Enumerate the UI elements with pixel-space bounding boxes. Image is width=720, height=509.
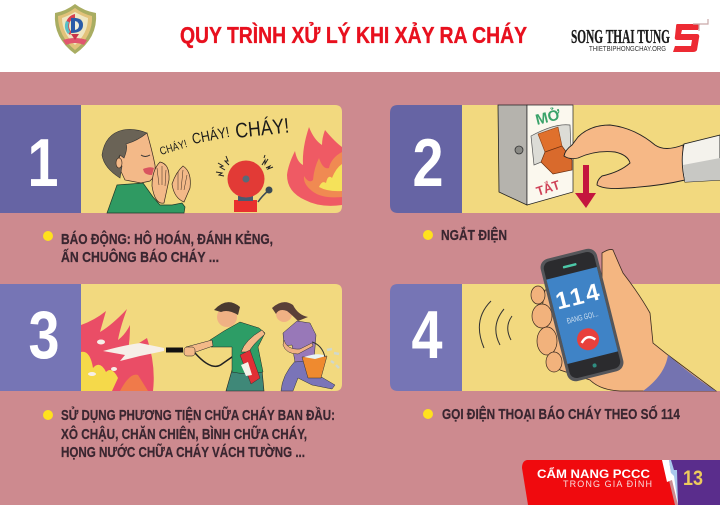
icon: phone: ĐANG GỌI... — [566, 309, 599, 326]
text: shouts: CHÁY! — [191, 124, 231, 148]
arrow: down — [575, 165, 596, 208]
illustration: switch: MỞ — [534, 105, 562, 129]
panel 4 yellow scene — [460, 284, 720, 391]
illustration: firefighter man — [166, 302, 265, 391]
panel 1 yellow scene — [81, 105, 342, 213]
caption 3: HỌNG NƯỚC CHỮA CHÁY VÁCH TƯỜNG ... — [61, 443, 305, 461]
panel 3 number block: 3 — [28, 297, 60, 373]
caption 2: NGẮT ĐIỆN — [441, 226, 507, 244]
icon: shield logo — [55, 4, 96, 54]
illustration: woman with bucket — [272, 302, 339, 391]
illustration: hand holding phone — [531, 247, 716, 391]
logo: Song Thai Tung — [571, 19, 708, 53]
icon: phone: 114 — [553, 278, 603, 315]
panel 1 number block — [0, 105, 82, 213]
illustration: switch: TẮT — [534, 177, 562, 199]
text: shouts: CHÁY! — [158, 137, 189, 158]
panel 4 number block: 4 — [412, 297, 443, 373]
footer badge: 13 — [683, 467, 703, 490]
panel 4 — [390, 247, 720, 391]
footer badge: CẨM NANG PCCC — [537, 466, 650, 481]
logo: Song Thai Tung: THIETBIPHONGCHAY.ORG — [589, 46, 666, 53]
text: shouts — [158, 114, 290, 158]
spray — [103, 343, 164, 361]
caption 2 — [423, 226, 507, 244]
icon: alarm bell — [216, 155, 273, 212]
panel 1 number block: 1 — [28, 125, 58, 201]
panel 2 number block: 2 — [412, 125, 444, 201]
footer badge — [522, 460, 720, 505]
caption 1: BÁO ĐỘNG: HÔ HOÁN, ĐÁNH KẺNG, — [61, 230, 273, 248]
icon: fire — [81, 309, 154, 391]
panel 2 number block — [390, 105, 462, 213]
caption 3: SỬ DỤNG PHƯƠNG TIỆN CHỮA CHÁY BAN ĐẦU: — [61, 406, 335, 424]
icon: phone — [539, 247, 625, 383]
illustration: shouting man — [102, 129, 190, 213]
icon: fire — [287, 127, 342, 206]
title: QUY TRÌNH XỬ LÝ KHI XẢY RA CHÁY — [180, 20, 527, 48]
panel 1 — [0, 105, 342, 213]
sound waves — [479, 301, 512, 348]
footer badge: TRONG GIA ĐÌNH — [563, 479, 652, 489]
text: shouts: CHÁY! — [234, 114, 290, 143]
illustration: hand — [564, 125, 720, 189]
panel 2 — [390, 105, 720, 213]
panel 3 yellow scene — [81, 284, 342, 391]
caption 1: ẤN CHUÔNG BÁO CHÁY ... — [61, 248, 219, 266]
panel 2 yellow scene — [460, 105, 720, 213]
panel 4 number block — [390, 284, 462, 391]
panel 3 number block — [0, 284, 82, 391]
panel 3 — [0, 284, 342, 391]
caption 1 — [43, 230, 273, 266]
fingers — [531, 286, 562, 372]
caption 3: XÔ CHẬU, CHĂN CHIÊN, BÌNH CHỮA CHÁY, — [61, 425, 307, 443]
illustration: switch — [498, 105, 573, 205]
caption 3 — [43, 406, 335, 461]
